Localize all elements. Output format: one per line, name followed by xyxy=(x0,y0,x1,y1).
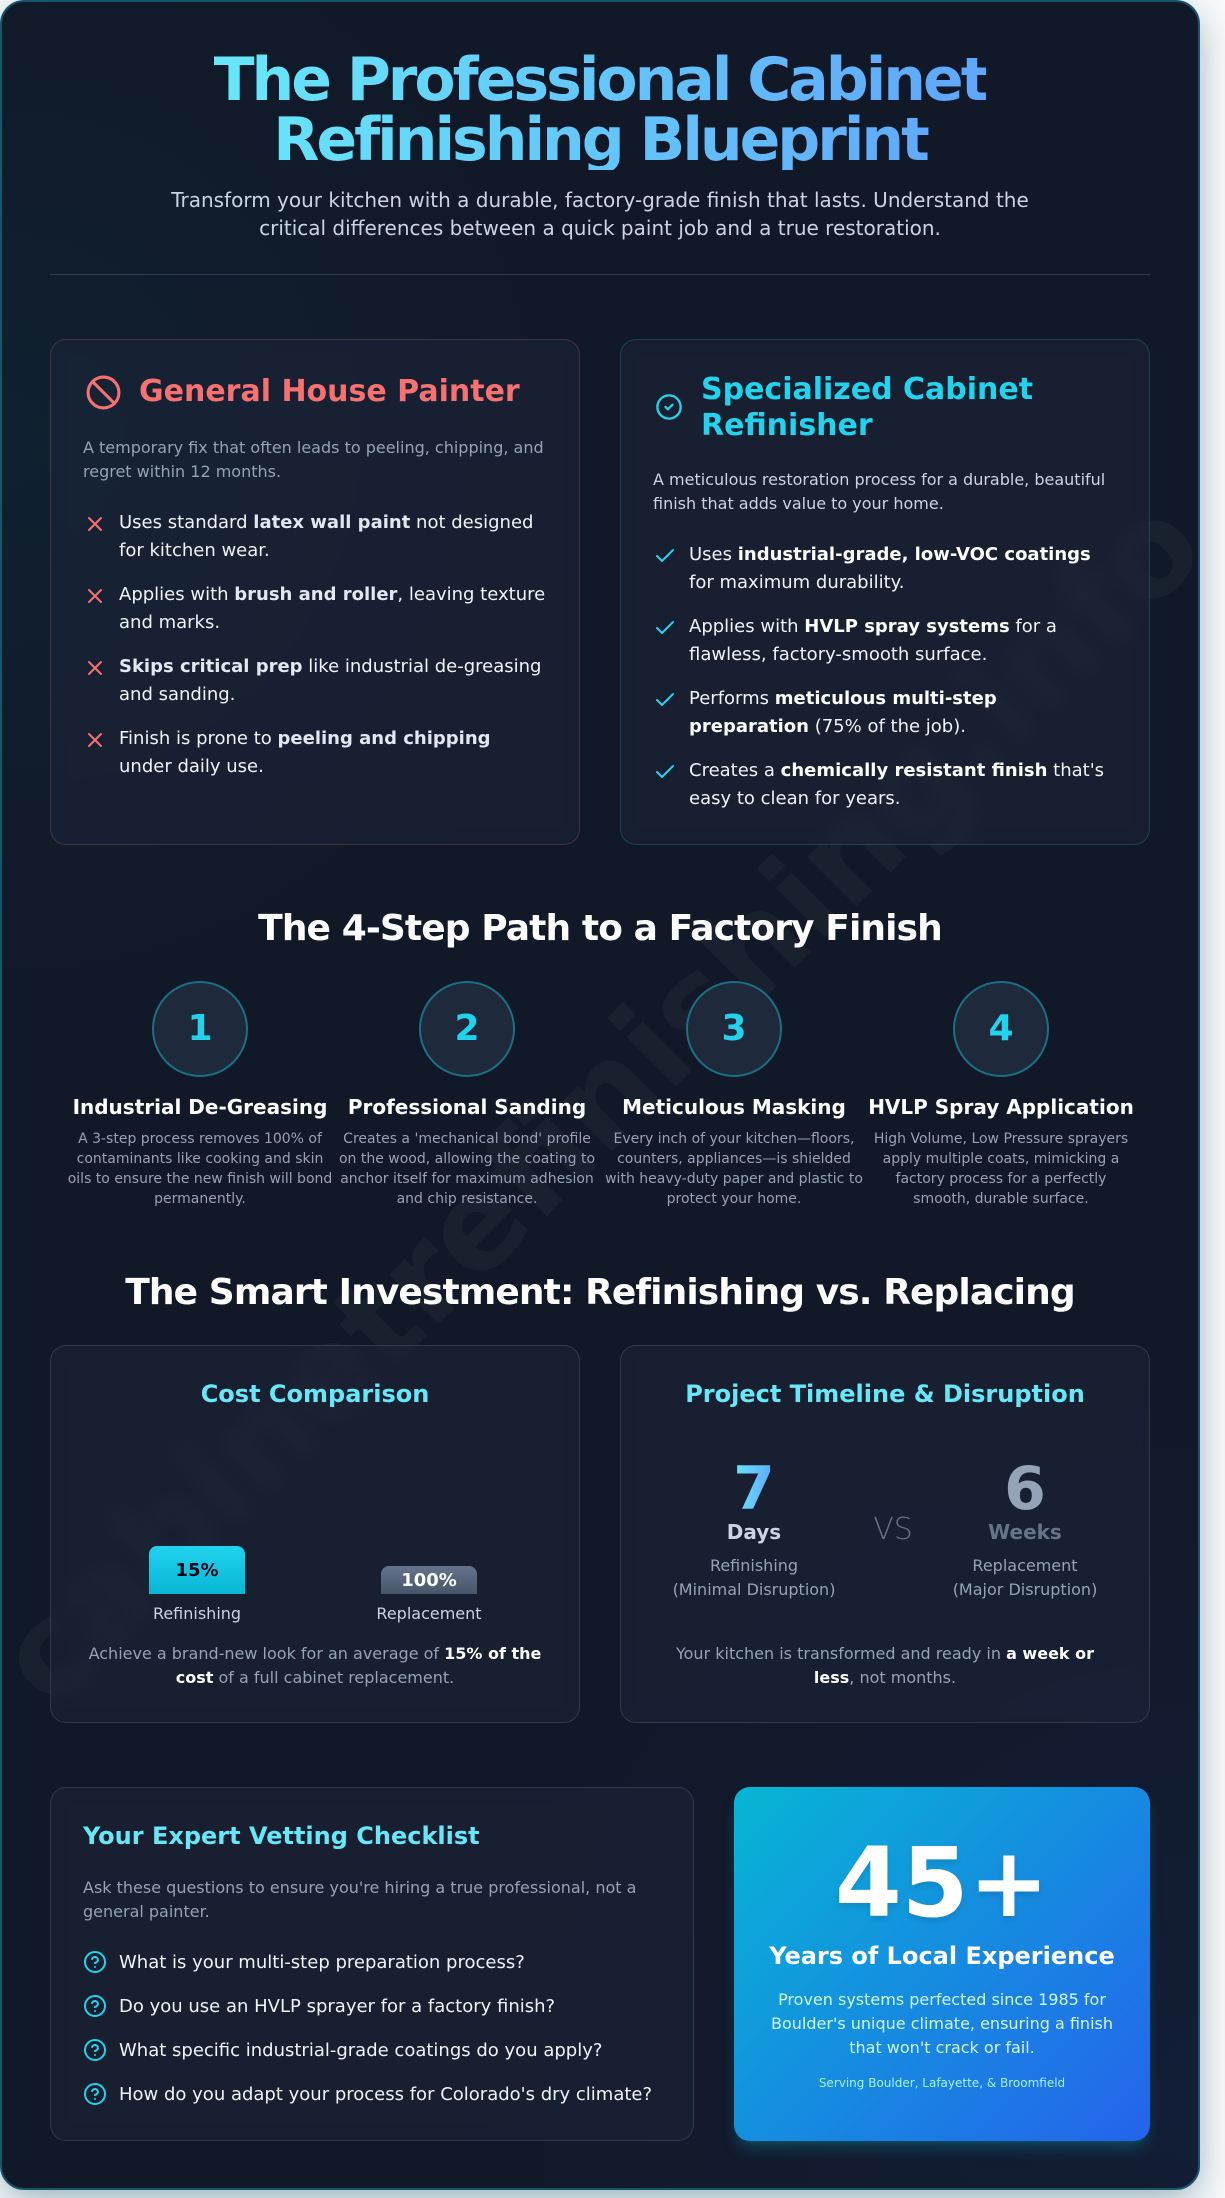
list item xyxy=(656,616,1057,665)
intro text: general painter. xyxy=(83,1902,210,1921)
list item: for kitchen wear. xyxy=(119,540,270,561)
subtitle: Transform your kitchen with a durable, factory-grade finish that lasts. Understand the xyxy=(171,188,1029,212)
intro text: Ask these questions to ensure you're hiring a true professional, not a xyxy=(83,1878,636,1897)
list item: Uses standard latex wall paint not designed xyxy=(119,512,533,533)
list item: flawless, factory-smooth surface. xyxy=(689,644,987,665)
list item: Uses industrial-grade, low-VOC coatings xyxy=(689,544,1091,565)
step description: and chip resistance. xyxy=(397,1191,537,1207)
icon: circle check xyxy=(656,394,682,420)
step title: HVLP Spray Application xyxy=(868,1095,1134,1119)
heading: 4-step path: The 4-Step Path to a Factory Finish xyxy=(258,908,942,949)
step description: anchor itself for maximum adhesion xyxy=(340,1171,594,1187)
step description: smooth, durable surface. xyxy=(913,1191,1089,1207)
step description: permanently. xyxy=(154,1191,246,1207)
list item: Performs meticulous multi-step xyxy=(689,688,997,709)
heading: specialized cabinet refinisher: Specialized Cabinet xyxy=(701,372,1033,407)
panel: expert vetting checklist xyxy=(50,1787,694,2141)
step 3 xyxy=(605,981,863,1207)
stat: 6 weeks xyxy=(953,1454,1097,1599)
bar label: Replacement xyxy=(376,1604,482,1623)
unit: Days xyxy=(727,1520,781,1544)
list item: Creates a chemically resistant finish that's xyxy=(689,760,1104,781)
number: 6 xyxy=(1004,1454,1046,1524)
step 4 xyxy=(868,981,1134,1207)
stat: 7 days xyxy=(673,1454,835,1599)
description: Replacement xyxy=(972,1556,1078,1575)
heading: specialized cabinet refinisher xyxy=(656,372,1033,443)
intro text: finish that adds value to your home. xyxy=(653,494,944,513)
description: (Major Disruption) xyxy=(953,1580,1097,1599)
step number xyxy=(686,981,782,1077)
list item: and marks. xyxy=(119,612,220,633)
list item: for maximum durability. xyxy=(689,572,904,593)
step description xyxy=(68,1131,332,1207)
callout text: that won't crack or fail. xyxy=(849,2038,1035,2057)
subtitle: critical differences between a quick paint job and a true restoration. xyxy=(259,216,941,240)
title: The Professional Cabinet xyxy=(214,45,986,115)
heading: smart investment: The Smart Investment: Refinishing vs. Replacing xyxy=(125,1272,1075,1313)
step number xyxy=(953,981,1049,1077)
step description: contaminants like cooking and skin xyxy=(77,1151,323,1167)
step description: on the wood, allowing the coating to xyxy=(339,1151,595,1167)
list item: easy to clean for years. xyxy=(689,788,901,809)
panel: project timeline xyxy=(620,1345,1150,1723)
title xyxy=(214,45,986,175)
list item xyxy=(656,544,1091,593)
step description xyxy=(874,1131,1128,1207)
intro text: A temporary fix that often leads to peeling, chipping, and xyxy=(83,438,544,457)
list item: Applies with brush and roller, leaving texture xyxy=(119,584,545,605)
description: (Minimal Disruption) xyxy=(673,1580,835,1599)
panel: 45+ years callout xyxy=(734,1787,1150,2141)
number: 7 xyxy=(733,1454,775,1524)
callout text: Proven systems perfected since 1985 for xyxy=(778,1990,1106,2009)
step description xyxy=(605,1131,863,1207)
description xyxy=(673,1556,835,1599)
panel: general house painter xyxy=(50,339,580,845)
note xyxy=(88,1644,541,1687)
step description: with heavy-duty paper and plastic to xyxy=(605,1171,863,1187)
intro text xyxy=(83,438,544,481)
list item: preparation (75% of the job). xyxy=(689,716,966,737)
list item: and sanding. xyxy=(119,684,235,705)
bar: replacement 100%: 100% xyxy=(401,1570,457,1591)
bar: refinishing 15%: 15% xyxy=(175,1560,219,1581)
callout text xyxy=(771,1990,1113,2057)
service area: Serving Boulder, Lafayette, & Broomfield xyxy=(819,2076,1065,2090)
panel: cost comparison xyxy=(50,1345,580,1723)
question: What specific industrial-grade coatings do you apply? xyxy=(119,2040,602,2061)
step 1 xyxy=(68,981,332,1207)
big number: 45+ xyxy=(835,1827,1049,1939)
intro text xyxy=(83,1878,636,1921)
panel title: Cost Comparison xyxy=(201,1380,429,1408)
title: Refinishing Blueprint xyxy=(273,105,927,175)
bar: refinishing 15% xyxy=(149,1546,245,1594)
description xyxy=(953,1556,1097,1599)
list item xyxy=(88,584,545,633)
question: How do you adapt your process for Colorado's dry climate? xyxy=(119,2084,652,2105)
list item: Skips critical prep like industrial de-greasing xyxy=(119,656,541,677)
step description: oils to ensure the new finish will bond xyxy=(68,1171,332,1187)
note xyxy=(676,1644,1094,1687)
step 2 xyxy=(339,981,595,1207)
callout heading: Years of Local Experience xyxy=(769,1942,1115,1970)
list item xyxy=(656,688,997,737)
step description xyxy=(339,1131,595,1207)
list item: under daily use. xyxy=(119,756,264,777)
step number: 4 xyxy=(988,1008,1014,1049)
step description: High Volume, Low Pressure sprayers xyxy=(874,1131,1128,1147)
bar label: Refinishing xyxy=(153,1604,241,1623)
callout text: Boulder's unique climate, ensuring a finish xyxy=(771,2014,1113,2033)
intro text: A meticulous restoration process for a durable, beautiful xyxy=(653,470,1105,489)
icon: ban xyxy=(86,376,120,410)
vs label: VS xyxy=(873,1512,913,1547)
step description: apply multiple coats, mimicking a xyxy=(883,1151,1119,1167)
panel: specialized cabinet refinisher xyxy=(620,339,1150,845)
note: cost of a full cabinet replacement. xyxy=(176,1668,454,1687)
bar: replacement 100% xyxy=(381,1566,477,1594)
list item xyxy=(88,656,541,705)
step number: 2 xyxy=(454,1008,480,1049)
step description: factory process for a perfectly xyxy=(896,1171,1106,1187)
step description: A 3-step process removes 100% of xyxy=(78,1131,322,1147)
step number xyxy=(419,981,515,1077)
subtitle xyxy=(171,188,1029,240)
step description: Creates a 'mechanical bond' profile xyxy=(343,1131,591,1147)
step description: Every inch of your kitchen—floors, xyxy=(614,1131,854,1147)
list item xyxy=(88,512,533,561)
step number xyxy=(152,981,248,1077)
list item xyxy=(88,728,491,777)
question: What is your multi-step preparation process? xyxy=(119,1952,525,1973)
step number: 1 xyxy=(187,1008,213,1049)
step description: counters, appliances—is shielded xyxy=(617,1151,851,1167)
panel title: Your Expert Vetting Checklist xyxy=(83,1822,480,1850)
note: less, not months. xyxy=(814,1668,956,1687)
intro text: regret within 12 months. xyxy=(83,462,281,481)
heading: specialized cabinet refinisher: Refinisher xyxy=(701,408,873,443)
question: Do you use an HVLP sprayer for a factory finish? xyxy=(119,1996,555,2017)
note: Achieve a brand-new look for an average of 15% of the xyxy=(89,1644,541,1663)
list item: Applies with HVLP spray systems for a xyxy=(689,616,1057,637)
step title: Industrial De-Greasing xyxy=(73,1095,327,1119)
list item xyxy=(656,760,1104,809)
step title: Meticulous Masking xyxy=(622,1095,846,1119)
intro text xyxy=(653,470,1105,513)
list item: Finish is prone to peeling and chipping xyxy=(119,728,491,749)
step description: protect your home. xyxy=(667,1191,801,1207)
unit: Weeks xyxy=(988,1520,1062,1544)
step number: 3 xyxy=(721,1008,747,1049)
panel title: Project Timeline & Disruption xyxy=(685,1380,1085,1408)
heading: general house painter: General House Painter xyxy=(139,374,520,409)
note: Your kitchen is transformed and ready in a week or xyxy=(676,1644,1094,1663)
step title: Professional Sanding xyxy=(348,1095,586,1119)
description: Refinishing xyxy=(710,1556,798,1575)
